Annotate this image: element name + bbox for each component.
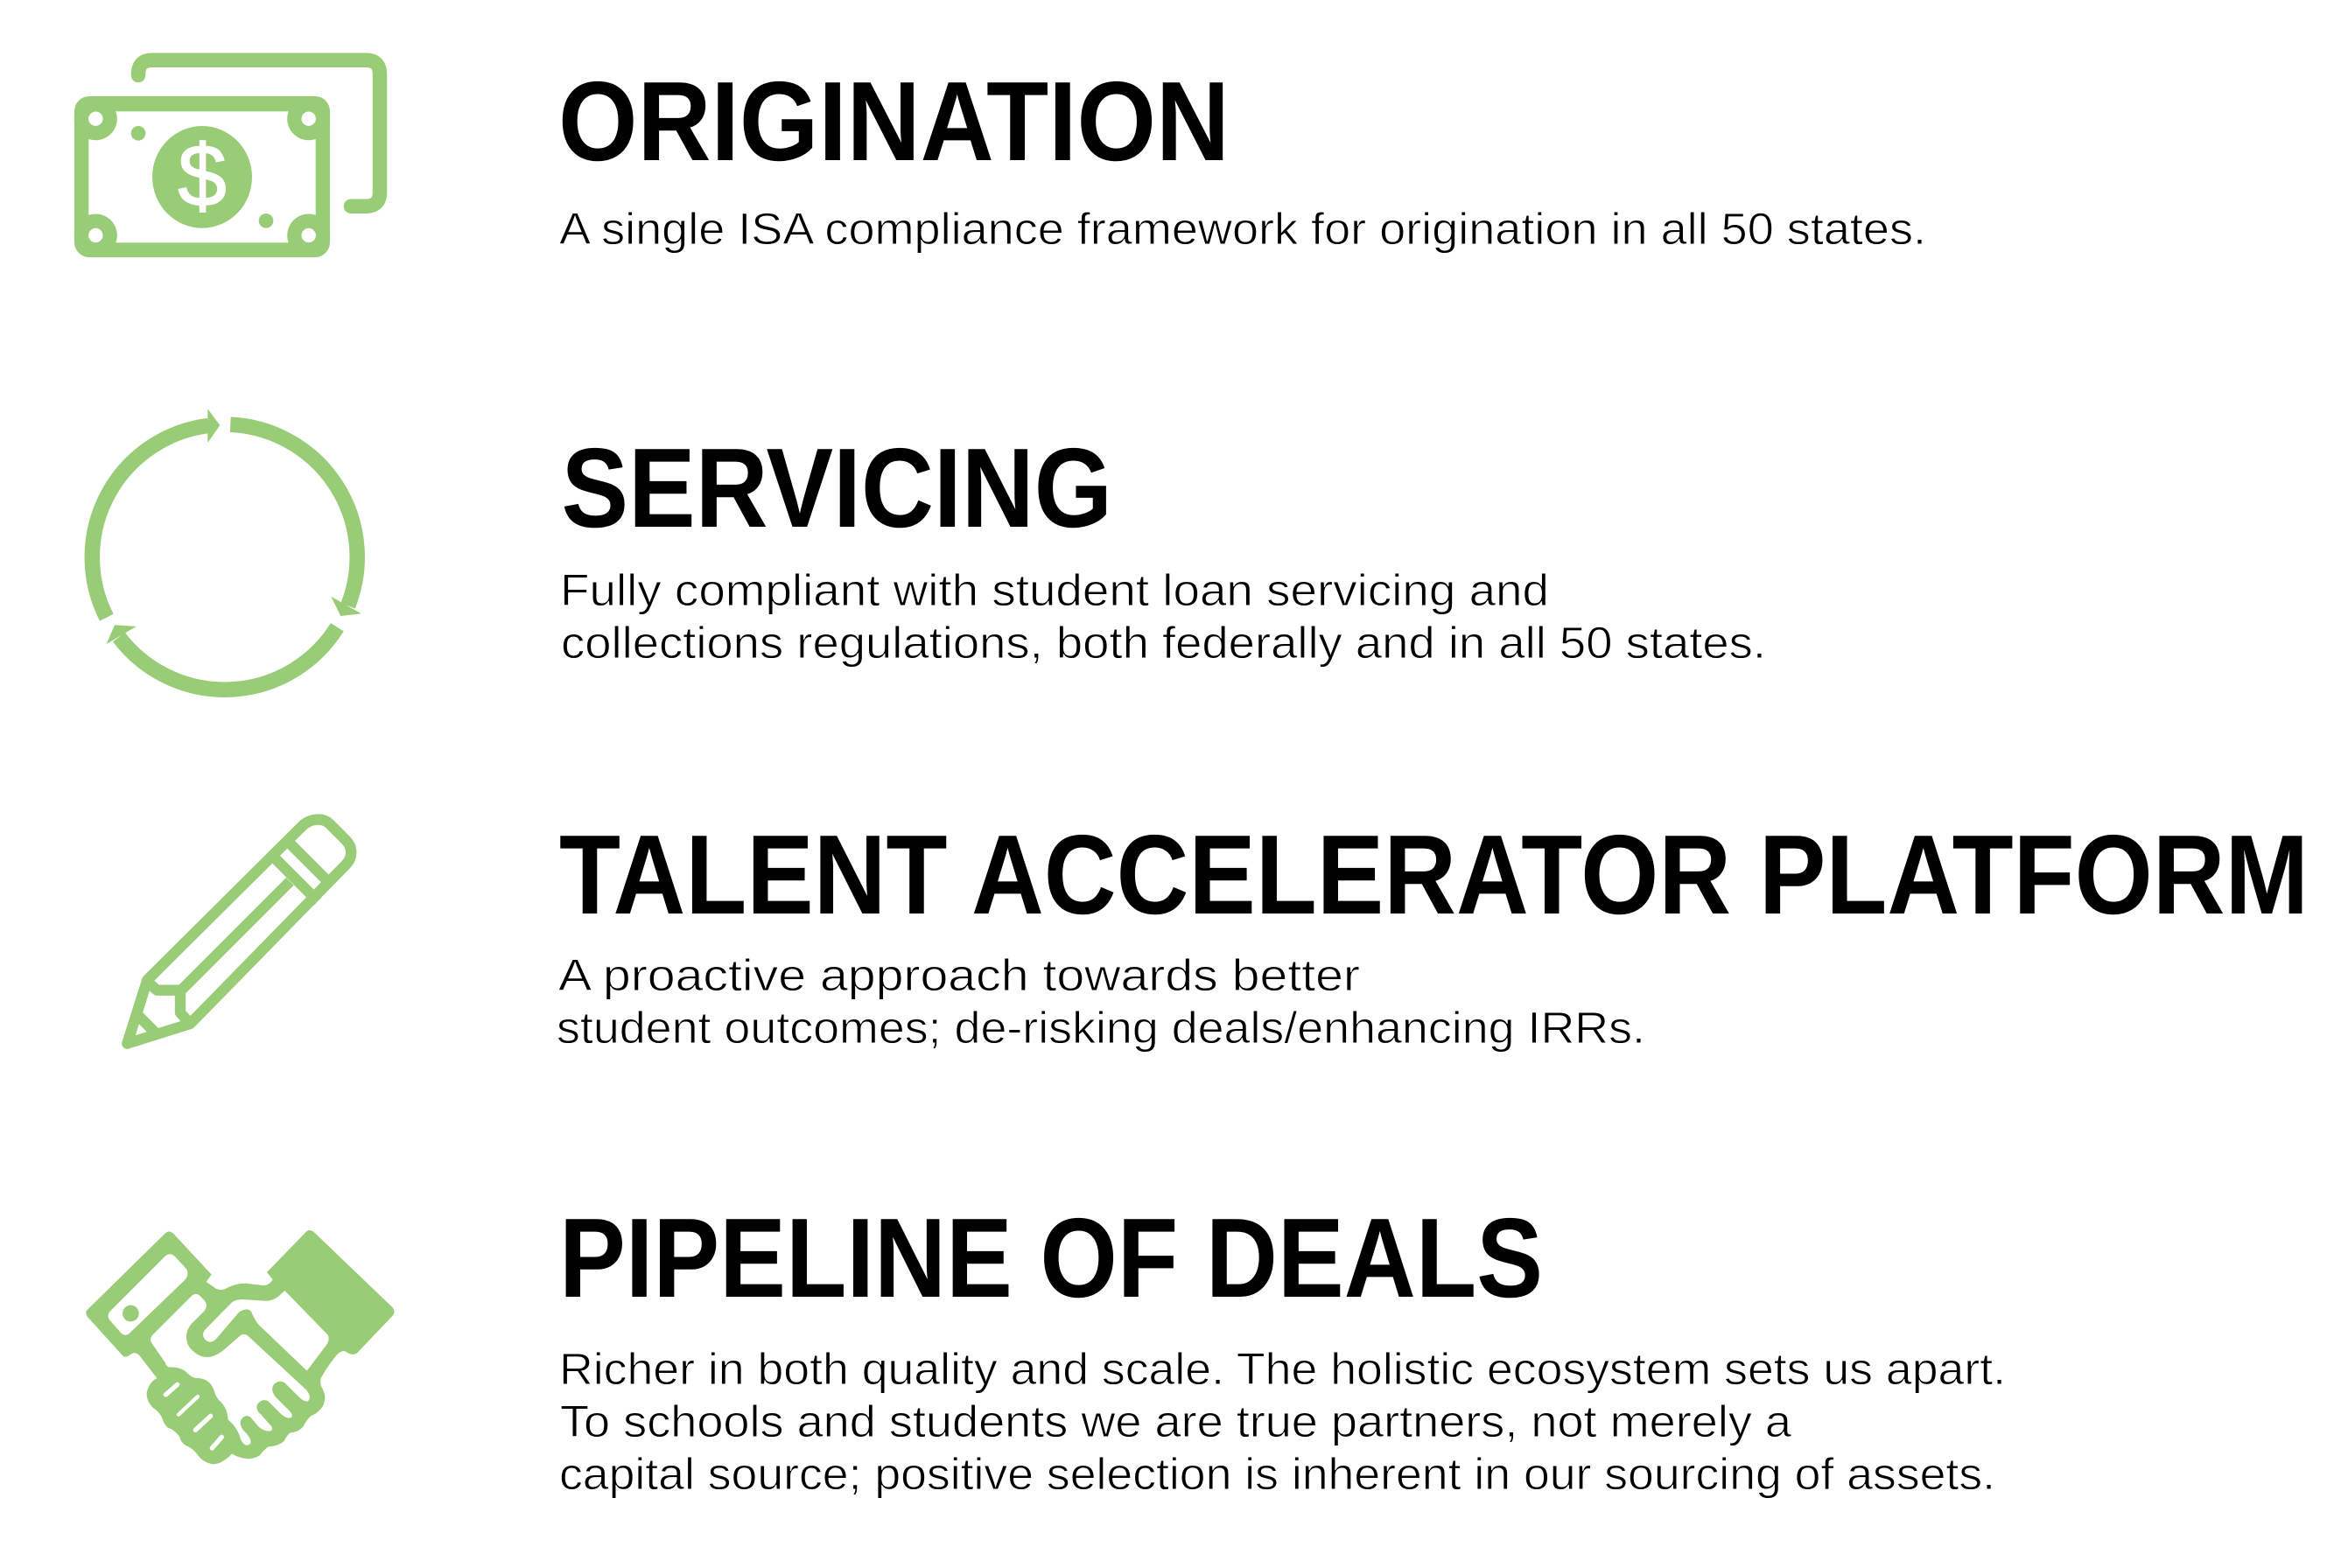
icon: circular arrows: [92, 409, 361, 690]
text: servicing description: collections regulations, both federally and in all 50 states.: [561, 618, 1766, 668]
icon: banknotes: [74, 60, 380, 257]
heading: servicing: SERVICING: [562, 425, 1112, 551]
icon: pencil: [127, 820, 351, 1044]
icon: banknotes: $: [178, 127, 227, 225]
text: origination description: A single ISA compliance framework for origination in all 50 states.: [559, 204, 1926, 254]
panel: talent accelerator platform: [127, 812, 2309, 1053]
text: servicing description: [560, 565, 1766, 668]
heading: origination: ORIGINATION: [558, 59, 1230, 185]
panel: pipeline of deals: [86, 1195, 2006, 1499]
text: talent accelerator description: student outcomes; de-risking deals/enhancing IRRs.: [557, 1003, 1645, 1053]
text: pipeline description: capital source; positive selection is inherent in our sourcing of assets.: [559, 1449, 1995, 1499]
panel: origination: [74, 59, 1926, 257]
text: talent accelerator description: [557, 950, 1645, 1053]
text: pipeline description: [559, 1344, 2006, 1499]
text: servicing description: Fully compliant with student loan servicing and: [560, 565, 1549, 615]
panel: servicing: [92, 409, 1766, 690]
text: pipeline description: Richer in both quality and scale. The holistic ecosystem sets us apart.: [559, 1344, 2006, 1394]
text: pipeline description: To schools and students we are true partners, not merely a: [560, 1396, 1792, 1446]
text: talent accelerator description: A proactive approach towards better: [558, 950, 1360, 1000]
icon: handshake: [86, 1230, 394, 1464]
heading: pipeline of deals: PIPELINE OF DEALS: [559, 1195, 1543, 1321]
